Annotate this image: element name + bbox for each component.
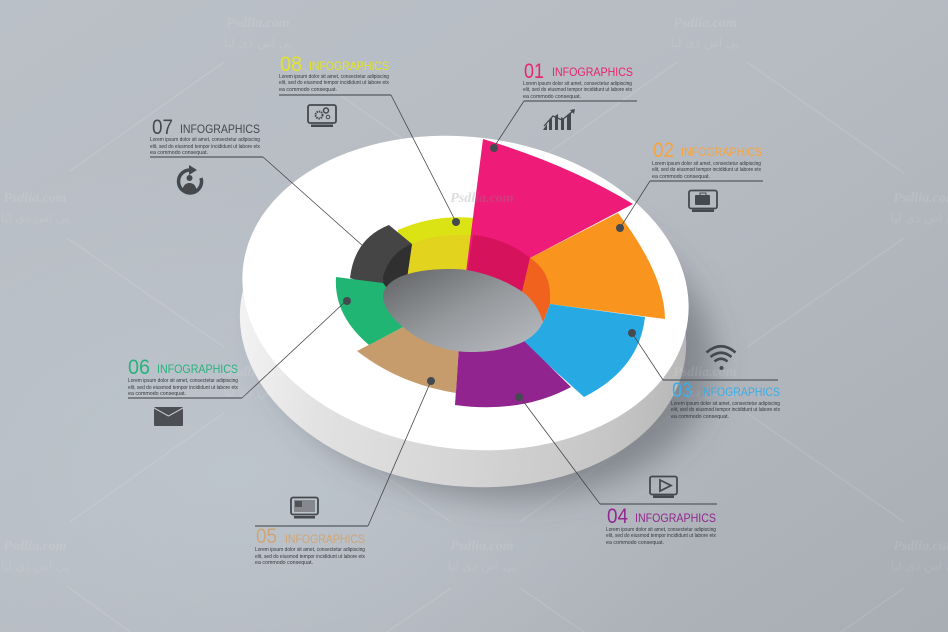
label 02: elit, sed do eiusmod tempor incididunt ut labore etx bbox=[652, 167, 761, 173]
watermark lines bbox=[67, 62, 904, 632]
label 05: Lorem ipsum dolor sit amet, consectetur adipiscing bbox=[255, 547, 365, 553]
label 07: 07 bbox=[152, 116, 173, 139]
label 05: INFOGRAPHICS bbox=[285, 532, 365, 546]
label 01: Lorem ipsum dolor sit amet, consectetur adipiscing bbox=[523, 81, 632, 87]
label 03: elit, sed do eiusmod tempor incididunt ut labore etx bbox=[671, 407, 780, 413]
label 07: elit, sed do eiusmod tempor incididunt ut labore etx bbox=[150, 144, 260, 150]
label 03: INFOGRAPHICS bbox=[700, 385, 780, 399]
label 03 bbox=[628, 329, 780, 420]
watermarks: Psdlia.com bbox=[226, 16, 290, 31]
label 06: 06 bbox=[128, 356, 150, 379]
label 07: INFOGRAPHICS bbox=[180, 122, 260, 136]
label 01: 01 bbox=[524, 60, 544, 83]
label 04: Lorem ipsum dolor sit amet, consectetur adipiscing bbox=[606, 527, 716, 533]
label 04: INFOGRAPHICS bbox=[635, 511, 716, 525]
label 03: 03 bbox=[672, 379, 692, 402]
watermarks: پی اس دی لیا bbox=[448, 559, 516, 574]
watermarks: پی اس دی لیا bbox=[671, 36, 739, 51]
watermarks: Psdlia.com bbox=[226, 365, 290, 380]
label 03: Lorem ipsum dolor sit amet, consectetur adipiscing bbox=[671, 401, 780, 407]
icon: monitor gears bbox=[308, 105, 336, 127]
label 01: ea commodo consequat. bbox=[523, 94, 581, 100]
watermarks: Psdlia.com bbox=[673, 365, 737, 380]
segment 07 black bbox=[350, 225, 412, 302]
segment 02 orange bbox=[520, 213, 665, 323]
disc side bbox=[222, 148, 704, 512]
watermarks: Psdlia.com bbox=[3, 539, 67, 554]
label 06: ea commodo consequat. bbox=[128, 391, 186, 397]
icon: envelope bbox=[154, 407, 183, 426]
watermarks: پی اس دی لیا bbox=[671, 385, 739, 400]
centre watermark over the ring: Psdlia.com bbox=[450, 191, 514, 206]
icon: wifi bbox=[706, 346, 736, 370]
label 08: ea commodo consequat. bbox=[279, 87, 337, 93]
label 03: ea commodo consequat. bbox=[671, 414, 729, 420]
label 06: elit, sed do eiusmod tempor incididunt ut labore etx bbox=[128, 385, 238, 391]
pie ring bbox=[336, 139, 665, 407]
label 08 bbox=[279, 53, 460, 226]
icon: monitor play bbox=[650, 476, 677, 498]
label 02: INFOGRAPHICS bbox=[681, 145, 762, 159]
label 07 bbox=[150, 116, 363, 246]
label 08: INFOGRAPHICS bbox=[309, 59, 389, 73]
label 07: Lorem ipsum dolor sit amet, consectetur adipiscing bbox=[150, 137, 260, 143]
segment 05 tan bbox=[357, 327, 459, 393]
label 02: ea commodo consequat. bbox=[652, 174, 710, 180]
label 04 bbox=[515, 393, 717, 546]
label 07: ea commodo consequat. bbox=[150, 150, 208, 156]
disc top bbox=[224, 111, 707, 475]
icon: circular arrow person bbox=[179, 165, 202, 193]
watermarks: پی اس دی لیا bbox=[1, 211, 69, 226]
watermarks: پی اس دی لیا bbox=[1, 559, 69, 574]
watermarks: Psdlia.com bbox=[3, 191, 67, 206]
segment 06 green bbox=[336, 277, 403, 345]
icon: rising chart bbox=[543, 109, 575, 130]
segment 03 blue bbox=[523, 304, 645, 397]
label 04: 04 bbox=[607, 505, 628, 528]
icon: monitor briefcase bbox=[689, 190, 717, 212]
label 06: Lorem ipsum dolor sit amet, consectetur adipiscing bbox=[128, 378, 238, 384]
segment 04 purple bbox=[455, 340, 571, 407]
watermarks: Psdlia.com bbox=[673, 16, 737, 31]
segment 01 pink bbox=[465, 139, 633, 300]
watermarks: پی اس دی لیا bbox=[224, 385, 292, 400]
label 01: elit, sed do eiusmod tempor incididunt ut labore etx bbox=[523, 87, 632, 93]
label 06: INFOGRAPHICS bbox=[157, 362, 238, 376]
label 04: ea commodo consequat. bbox=[606, 540, 664, 546]
label 06 bbox=[128, 297, 351, 398]
segment 08 yellow bbox=[398, 217, 475, 300]
label 01: INFOGRAPHICS bbox=[552, 65, 633, 79]
disc shadow bbox=[249, 167, 731, 523]
label 02 bbox=[616, 139, 763, 232]
label 02: Lorem ipsum dolor sit amet, consectetur adipiscing bbox=[652, 161, 761, 167]
label 05 bbox=[255, 377, 435, 566]
label 05: ea commodo consequat. bbox=[255, 560, 313, 566]
label 08: Lorem ipsum dolor sit amet, consectetur adipiscing bbox=[279, 74, 389, 80]
label 08: 08 bbox=[280, 53, 302, 76]
label 01 bbox=[490, 60, 637, 152]
watermarks: Psdlia.com bbox=[450, 539, 514, 554]
3D disc bbox=[222, 111, 707, 512]
label 05: elit, sed do eiusmod tempor incididunt ut labore etx bbox=[255, 554, 365, 560]
label 08: elit, sed do eiusmod tempor incididunt ut labore etx bbox=[279, 80, 389, 86]
label 04: elit, sed do eiusmod tempor incididunt ut labore etx bbox=[606, 533, 716, 539]
icon: monitor document bbox=[291, 498, 318, 518]
label 02: 02 bbox=[653, 139, 674, 162]
centre hole bbox=[383, 269, 543, 352]
label 05: 05 bbox=[256, 525, 277, 548]
watermarks: پی اس دی لیا bbox=[224, 36, 292, 51]
